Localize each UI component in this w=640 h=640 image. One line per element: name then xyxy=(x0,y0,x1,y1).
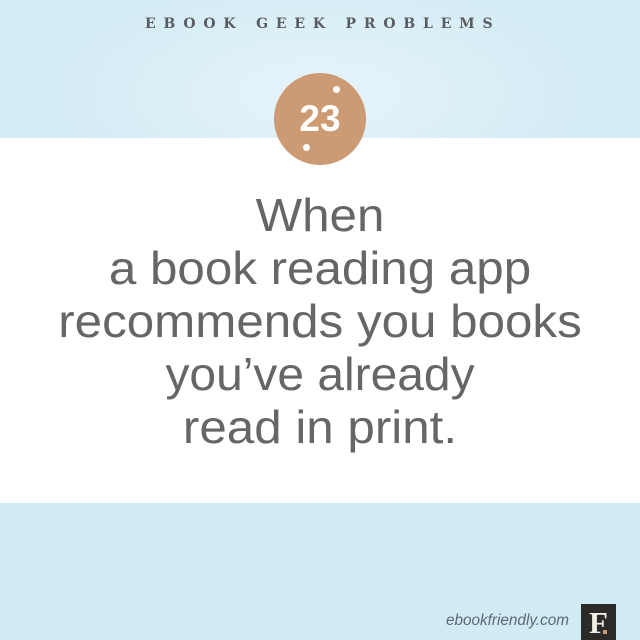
badge dot bottom xyxy=(302,144,310,150)
number badge xyxy=(274,73,366,165)
heading: EBOOK GEEK PROBLEMS xyxy=(145,16,500,32)
main text block xyxy=(58,189,582,453)
main text block: you’ve already xyxy=(165,348,475,400)
main text block: When xyxy=(256,189,384,241)
website url: ebookfriendly.com xyxy=(446,612,569,629)
logo xyxy=(581,604,616,640)
badge dot top xyxy=(332,86,340,92)
main text block: a book reading app xyxy=(109,242,531,294)
logo letter: F xyxy=(589,605,608,640)
main text block: read in print. xyxy=(183,401,457,453)
main text block: recommends you books xyxy=(58,295,582,347)
logo dot xyxy=(603,630,607,634)
badge number: 23 xyxy=(299,98,341,139)
top background band xyxy=(0,0,640,138)
bottom background band xyxy=(0,503,640,640)
